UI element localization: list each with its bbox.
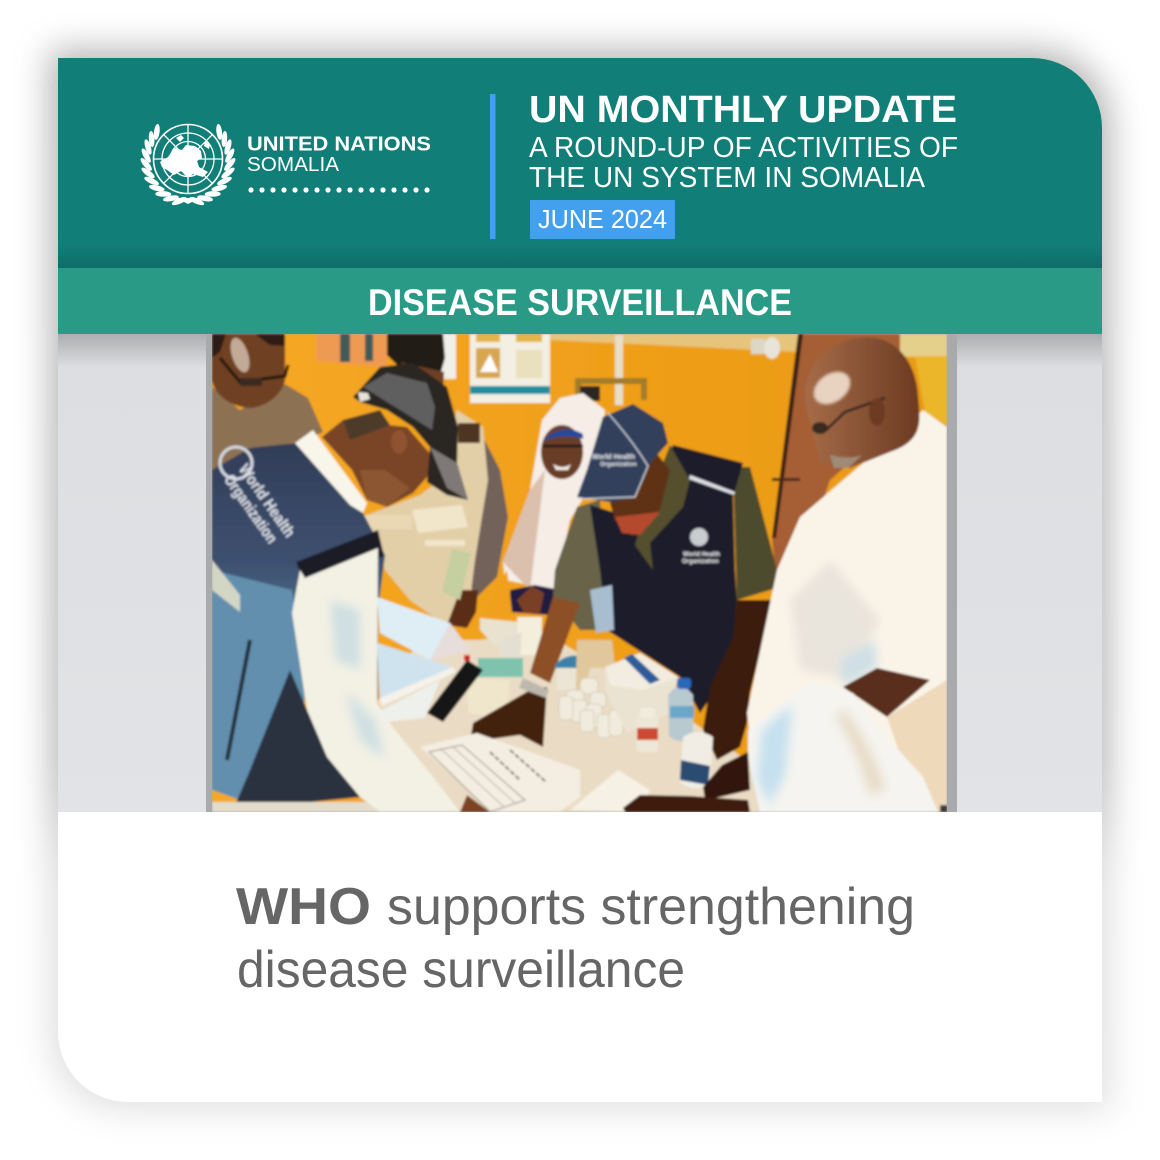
man behind	[386, 334, 446, 373]
centre man: vest and shirt	[590, 445, 743, 713]
medicine: jars and box	[557, 668, 576, 690]
photo: health workers around a table: World Health	[683, 552, 720, 558]
table	[377, 630, 760, 812]
subtitle line 1: A ROUND-UP OF ACTIVITIES OF	[529, 132, 958, 164]
man top left	[212, 384, 323, 470]
cup and phone	[478, 658, 523, 677]
woman	[503, 393, 605, 590]
man left: vest	[212, 442, 386, 700]
caption text	[236, 878, 915, 999]
title: UN MONTHLY UPDATE	[529, 89, 957, 131]
photo: health workers around a table	[212, 334, 947, 812]
photo: health workers around a table: World Health	[592, 454, 635, 461]
posters	[316, 334, 387, 367]
vest print	[224, 461, 295, 546]
vest print: World Health	[235, 461, 298, 541]
paper	[420, 733, 580, 812]
desk device and boxes	[480, 618, 520, 645]
wall	[212, 334, 947, 812]
dotted rule	[248, 187, 430, 193]
vest print: Organization	[220, 472, 280, 547]
wordmark: United Nations: UNITED NATIONS	[247, 134, 431, 156]
panel: header	[58, 58, 1102, 268]
man left: head and cap	[322, 420, 433, 507]
wall scale	[615, 335, 623, 405]
logo: United Nations Somalia	[139, 124, 431, 207]
right man: arm	[843, 668, 930, 717]
medicine: bottles	[668, 686, 693, 741]
centre man: arms	[530, 597, 580, 683]
panel: section band	[58, 268, 1102, 334]
section heading: DISEASE SURVEILLANCE	[368, 282, 792, 323]
man left: arm and collar	[292, 548, 467, 812]
right man: shirt	[744, 408, 947, 750]
subtitle line 2: THE UN SYSTEM IN SOMALIA	[529, 162, 926, 194]
bottom hijab	[748, 682, 938, 812]
icon: UN emblem	[139, 124, 237, 207]
panel: grey photo backdrop	[58, 334, 1102, 812]
centre man: sleeves	[553, 500, 607, 630]
panel: white caption area	[58, 812, 1102, 1102]
bottom hands	[703, 752, 750, 800]
book	[377, 643, 453, 698]
caption: disease surveillance: disease surveillance	[237, 941, 685, 999]
photo: health workers around a table: Organization	[600, 462, 637, 468]
right man: head	[805, 338, 919, 468]
door	[772, 334, 900, 570]
date badge: JUNE 2024	[538, 204, 667, 234]
caption: supports strengthening: supports strengthening	[387, 878, 915, 936]
photo: health workers around a table: Organization	[682, 559, 719, 565]
vertical divider	[490, 94, 496, 239]
wordmark: Somalia: SOMALIA	[247, 154, 340, 176]
caption: WHO: WHO	[236, 878, 371, 936]
photo side shadows	[206, 334, 957, 812]
centre man: head and cap	[610, 445, 670, 536]
